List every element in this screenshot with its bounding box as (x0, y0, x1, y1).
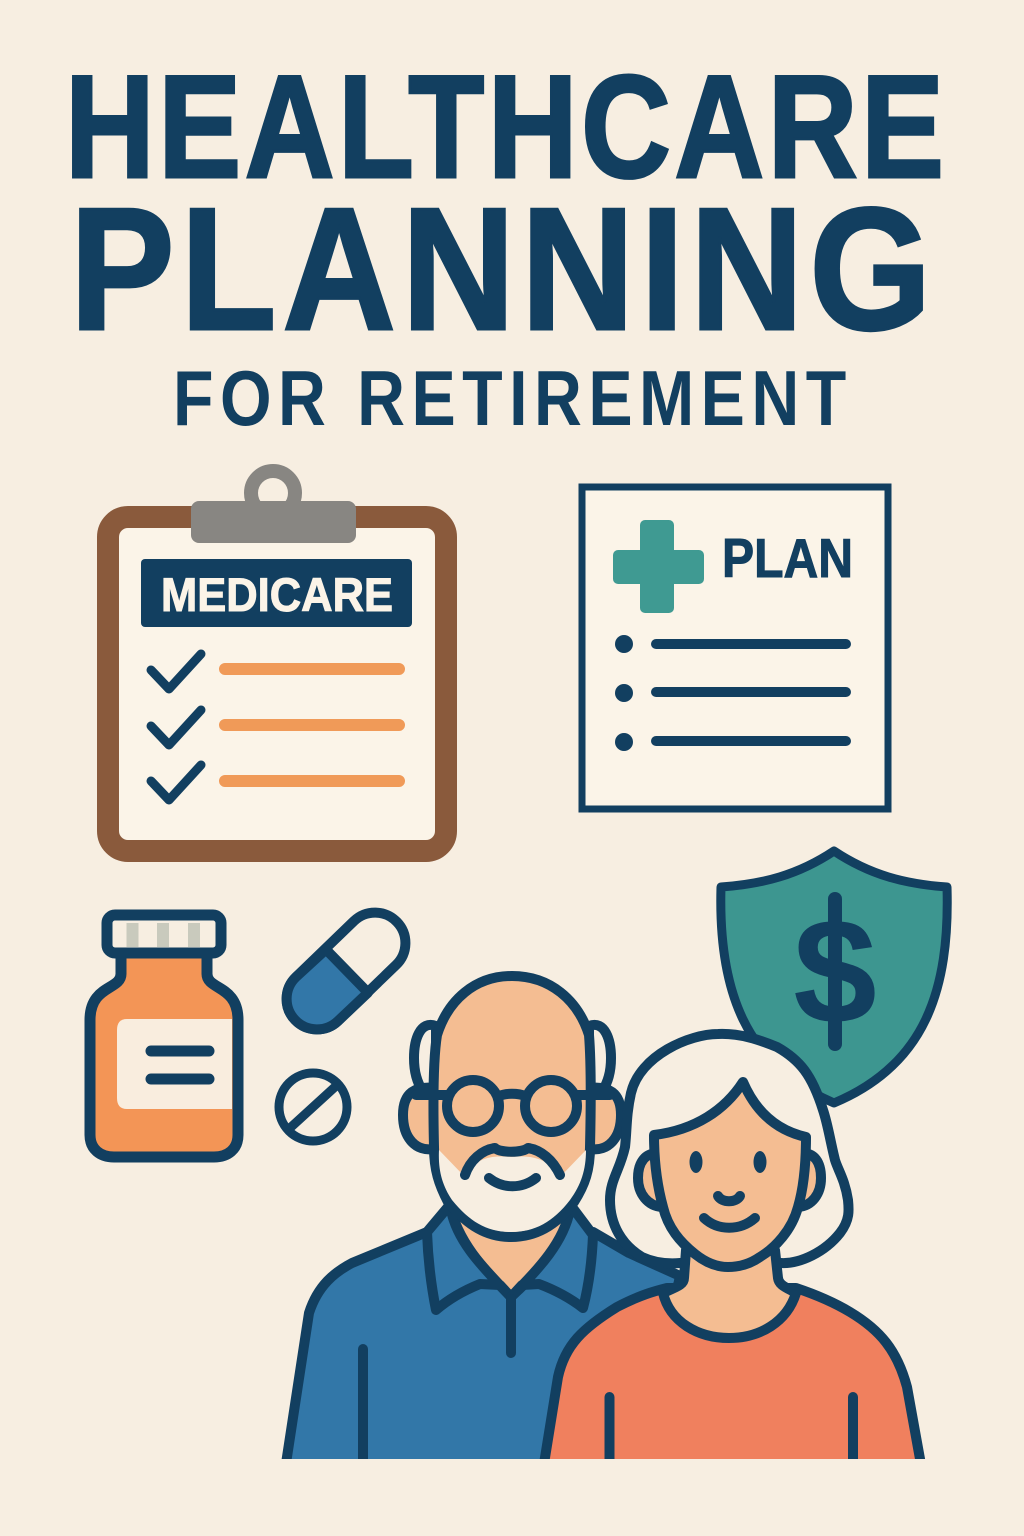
title: FOR RETIREMENT (173, 355, 846, 442)
title: PLANNING (70, 172, 931, 367)
bullet list (615, 635, 846, 751)
icon: medical cross (613, 520, 704, 613)
title (65, 44, 944, 442)
man beard (439, 1150, 586, 1232)
man collar (427, 1207, 593, 1310)
panel: plan document (582, 487, 888, 809)
woman figure (543, 1034, 922, 1470)
man hair tufts (414, 1025, 611, 1092)
woman face (654, 1082, 806, 1267)
woman ears (638, 1154, 821, 1207)
woman sleeve creases (610, 1397, 853, 1470)
man glasses (416, 1080, 610, 1132)
plan heading: PLAN (722, 527, 853, 589)
icon: pill bottle (90, 915, 238, 1157)
icon: capsule (287, 913, 405, 1029)
man figure (285, 976, 680, 1470)
man neck (459, 1221, 561, 1299)
clipboard clip (191, 471, 356, 543)
man sleeve crease (358, 1349, 368, 1470)
man shirt (285, 1232, 680, 1470)
icon: round tablet (279, 1073, 347, 1141)
man mustache and mouth (465, 1148, 560, 1175)
woman shirt (543, 1288, 922, 1470)
icon: medicare clipboard (108, 471, 446, 851)
medicare label: MEDICARE (161, 568, 393, 621)
man ears (403, 1088, 621, 1149)
title: HEALTHCARE (65, 44, 944, 208)
woman hair (610, 1034, 849, 1263)
checklist (151, 654, 399, 800)
woman neck (663, 1250, 796, 1338)
man head (433, 976, 591, 1237)
icon: shield with dollar: $ (793, 887, 877, 1055)
icon: shield with dollar (721, 851, 947, 1103)
man placket (506, 1299, 516, 1353)
woman features (690, 1151, 766, 1228)
